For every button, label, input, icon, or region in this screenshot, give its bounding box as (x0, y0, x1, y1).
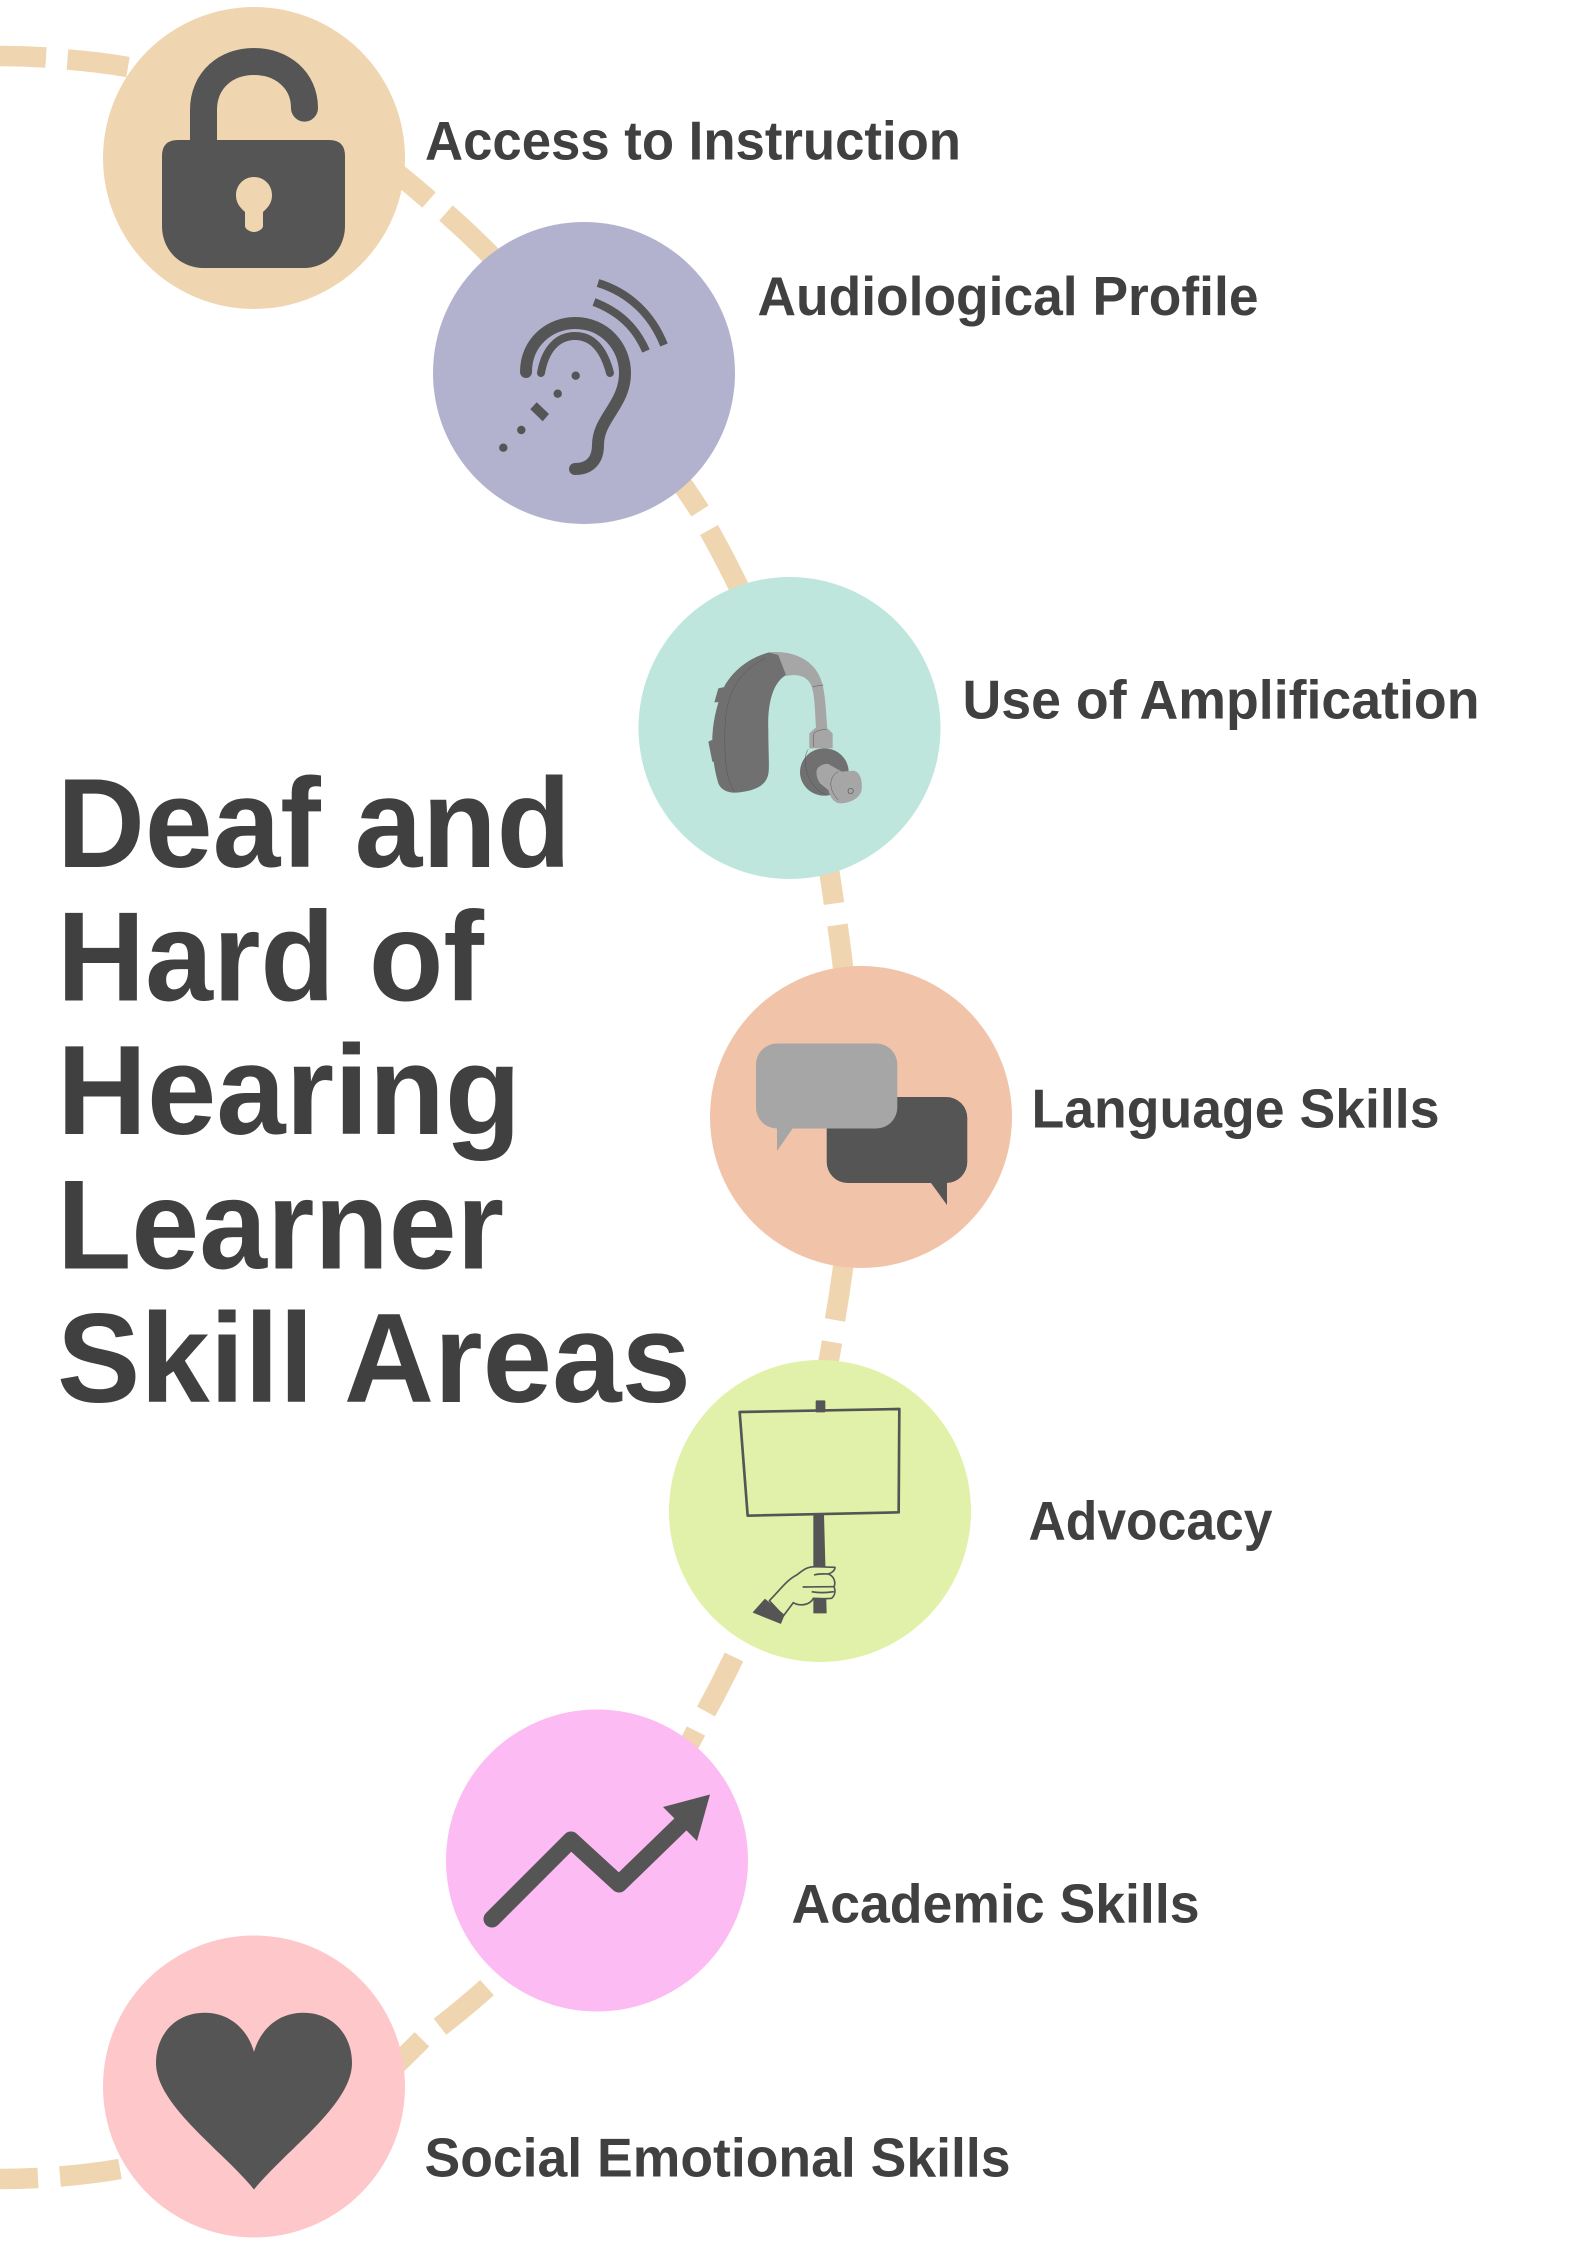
step: advocacy (669, 1360, 1273, 1662)
label: language skills: Language Skills (1032, 1078, 1440, 1140)
icon: hand holding sign (740, 1400, 899, 1623)
label: audiological profile: Audiological Profile (758, 265, 1258, 327)
step: access to instruction (103, 7, 961, 309)
icon: ear with sound waves (499, 283, 664, 469)
label: social emotional skills: Social Emotional Skills (424, 2127, 1010, 2189)
step: use of amplification (638, 577, 1480, 879)
step: language skills (710, 966, 1440, 1268)
title: Hard of (57, 886, 485, 1028)
icon: rising arrow (492, 1794, 710, 1919)
step: social emotional skills (103, 1936, 1010, 2238)
label: use of amplification: Use of Amplification (962, 668, 1480, 730)
dashed arc connector (0, 56, 845, 2179)
title: Hearing (57, 1019, 521, 1161)
label: access to instruction: Access to Instruction (425, 110, 961, 172)
title: Deaf and (57, 752, 571, 894)
title: Skill Areas (57, 1287, 691, 1429)
icon: hearing aid (708, 652, 862, 803)
title: Learner (57, 1154, 504, 1296)
icon: open padlock (162, 62, 345, 268)
label: academic skills: Academic Skills (792, 1872, 1200, 1934)
step: academic skills (446, 1710, 1200, 2012)
icon: heart (156, 2013, 352, 2190)
icon: speech bubbles (756, 1044, 967, 1205)
step: audiological profile (433, 222, 1258, 524)
label: advocacy: Advocacy (1028, 1490, 1273, 1552)
